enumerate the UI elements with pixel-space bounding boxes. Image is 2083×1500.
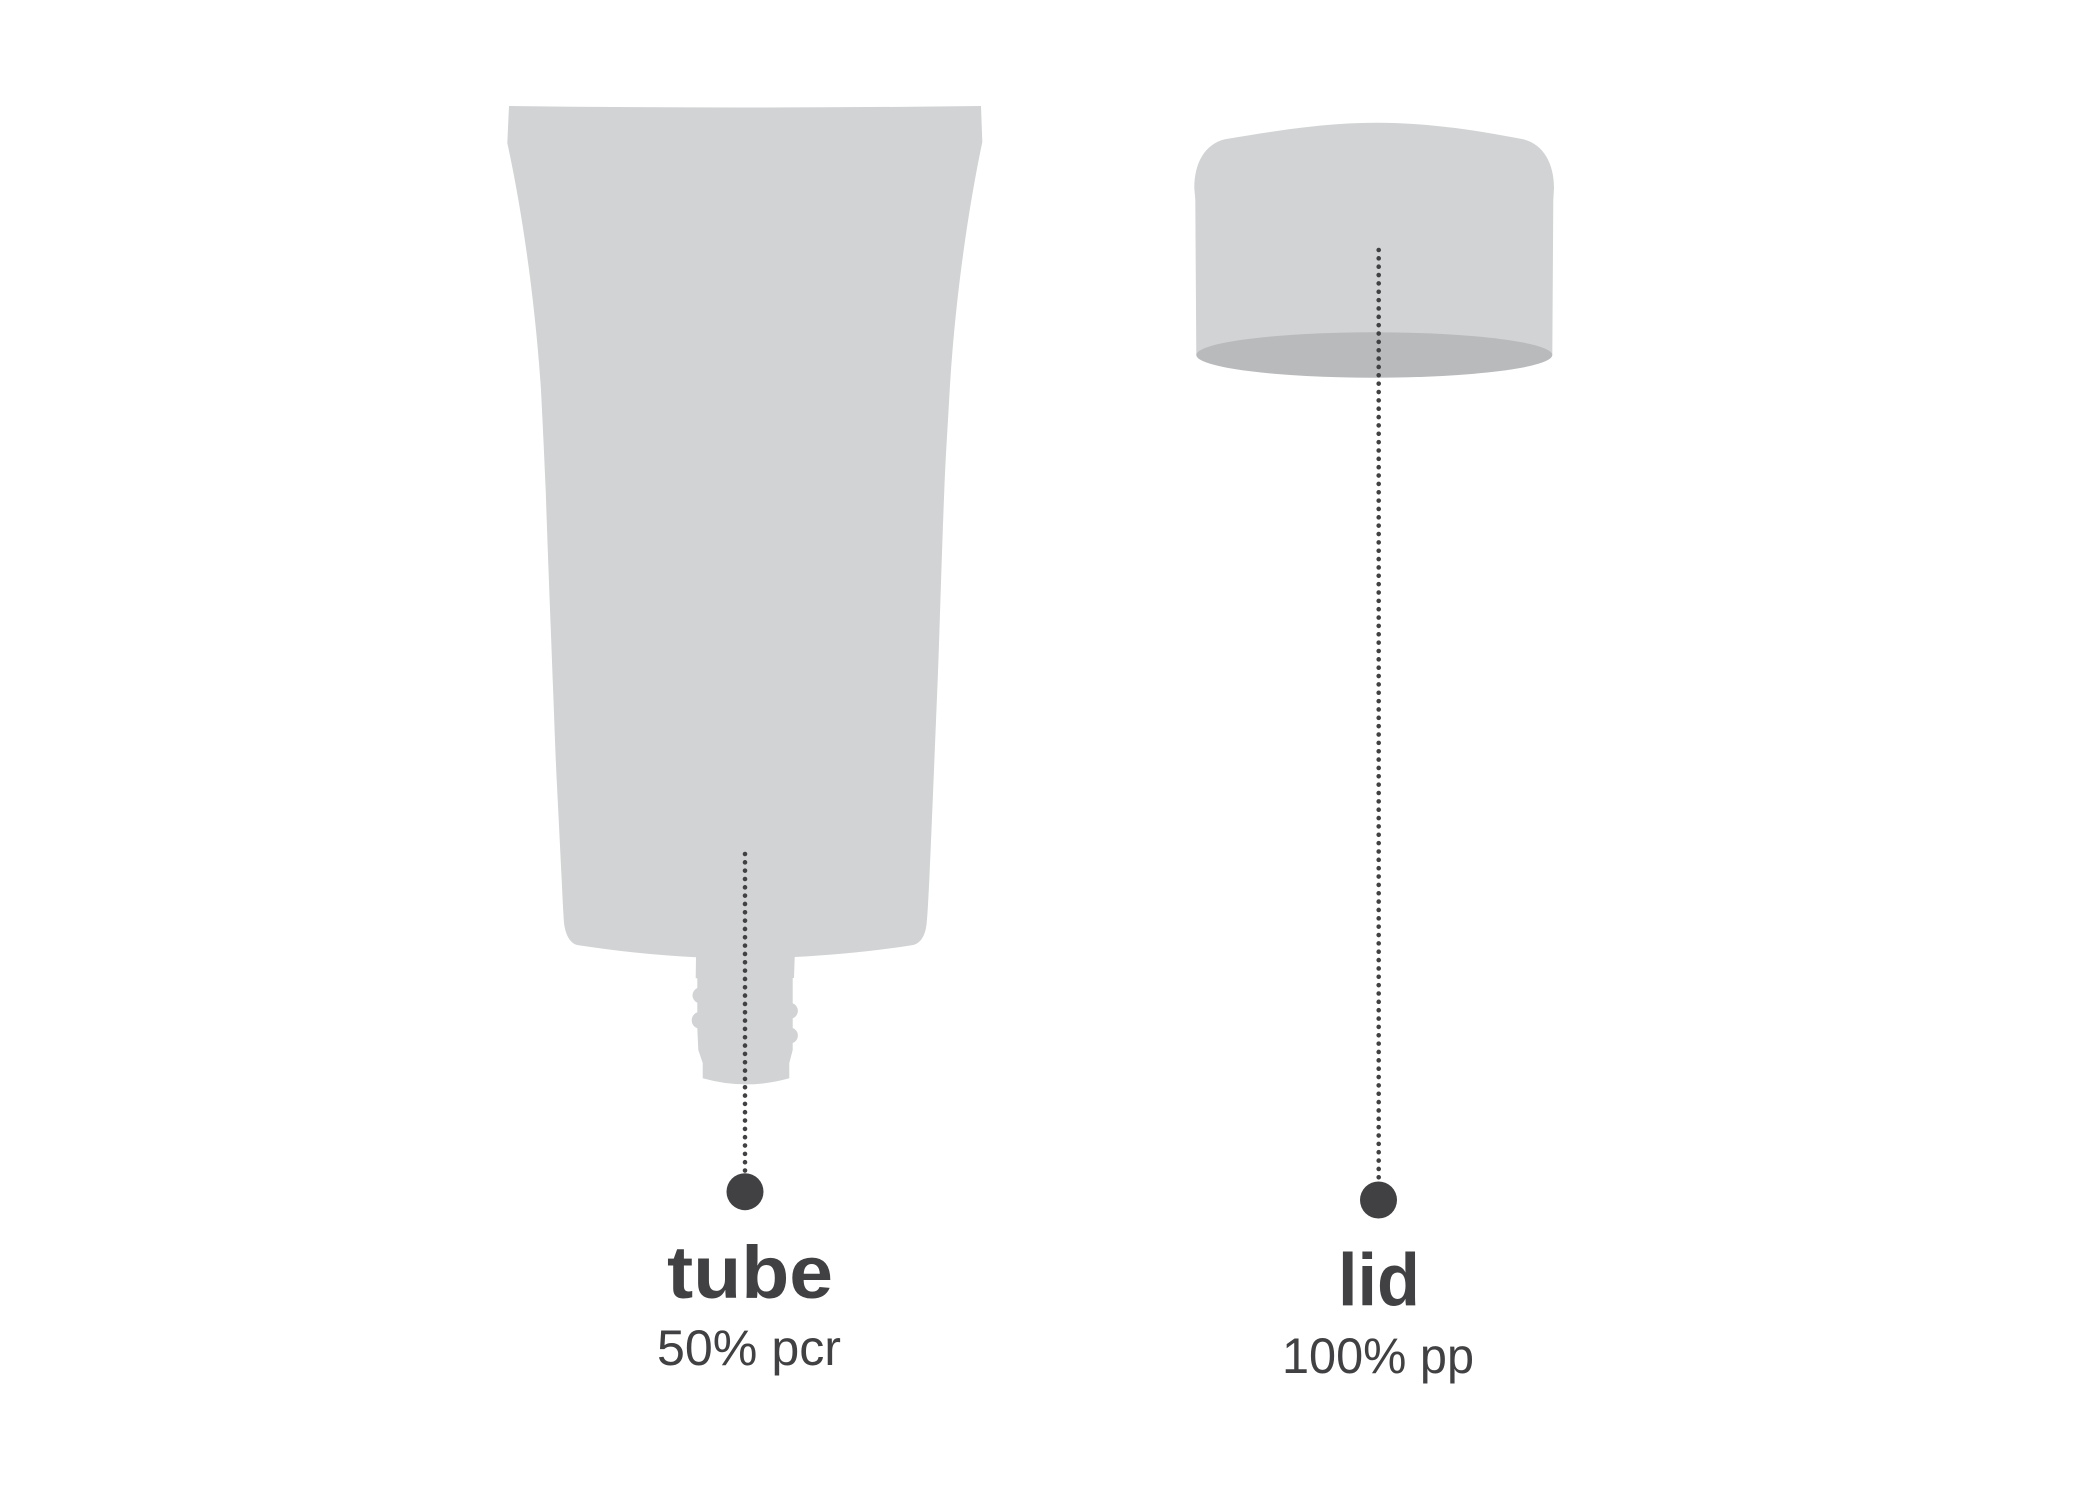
sublabel: 100% pp: 100% pp <box>1282 1328 1474 1384</box>
icon: tube silhouette <box>507 106 982 1084</box>
dotted leader line: lid <box>1376 250 1381 1179</box>
icon: lid body <box>1194 123 1554 355</box>
icon: lid opening <box>1196 332 1552 378</box>
dotted leader line: tube <box>743 854 747 1171</box>
marker dot: lid <box>1360 1182 1397 1218</box>
sublabel: 50% pcr: 50% pcr <box>657 1320 841 1376</box>
marker dot: tube <box>726 1173 764 1210</box>
panel: tube <box>507 106 982 1376</box>
label: lid: lid <box>1338 1239 1420 1322</box>
label: tube: tube <box>667 1231 833 1314</box>
panel: lid <box>1194 123 1554 1384</box>
